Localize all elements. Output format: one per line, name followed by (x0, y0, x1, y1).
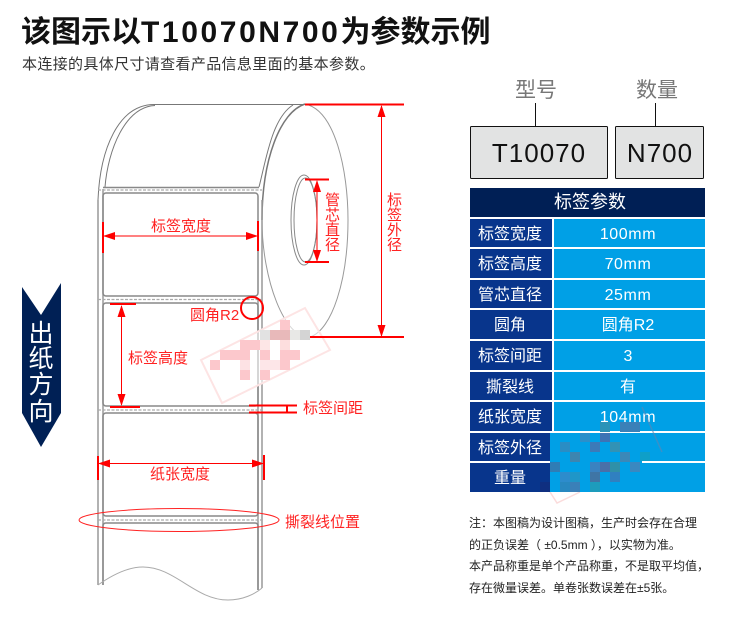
dimension: outer diameter: 外 (387, 222, 402, 239)
row: tear line (470, 372, 705, 400)
model code box: T10070 (492, 138, 586, 168)
row: label gap (470, 341, 705, 370)
note text: 存在微量误差。单卷张数误差在±5张。 (469, 580, 674, 595)
dimension: label width: 标签宽度 (151, 218, 211, 235)
subtitle: 本连接的具体尺寸请查看产品信息里面的基本参数。 (22, 56, 375, 73)
dimension: paper width: 纸张宽度 (150, 466, 210, 483)
title: 该图示以T10070N700为参数示例 (21, 16, 490, 49)
parameter table: 标签参数 (554, 192, 626, 212)
parameter table (470, 188, 705, 492)
core hole (291, 175, 317, 265)
row: paper width: 104mm (600, 409, 656, 426)
row: outer diameter (470, 433, 705, 461)
row: weight: 重量 (494, 469, 526, 487)
perforation lines (98, 190, 262, 520)
watermark stamp outline (642, 407, 662, 452)
note text: 本产品称重是单个产品称重，不是取平均值， (469, 558, 709, 573)
red dimension annotations (79, 104, 404, 532)
note text: 的正负误差（ ±0.5mm ），以实物为准。 (469, 537, 681, 552)
roll end face inner rim (262, 104, 305, 220)
roll body outline (98, 104, 305, 200)
row: label gap: 3 (624, 348, 633, 365)
row: tear line: 撕裂线 (486, 378, 534, 396)
dimension: paper width (98, 455, 264, 483)
dimension: label gap (249, 400, 363, 417)
dimension: outer diameter: 径 (387, 237, 402, 254)
row: corner (470, 310, 705, 339)
quantity code box: 数量 (636, 79, 678, 102)
dimension: outer diameter: 标 (387, 192, 402, 209)
watermark stamp outline (201, 308, 330, 403)
row: label height (470, 249, 705, 278)
dimension: label height (110, 304, 188, 407)
row: paper width: 纸张宽度 (478, 408, 542, 426)
row: core diameter: 管芯直径 (478, 286, 542, 304)
callout: tear line position (79, 508, 360, 532)
watermark: blue mosaic (540, 407, 662, 503)
arrow: paper feed direction (22, 283, 61, 447)
dimension: corner radius: 圆角R2 (190, 307, 239, 324)
row: tear line: 有 (620, 378, 636, 396)
dimension: core diameter: 径 (325, 237, 340, 254)
model code box: 型号 (515, 79, 557, 102)
row: label width: 100mm (600, 226, 656, 243)
row: core diameter: 25mm (605, 287, 651, 304)
label 3 (103, 413, 258, 516)
arrow: paper feed direction: 出 (28, 320, 54, 348)
dimension: outer diameter: 签 (387, 207, 402, 224)
dimension: label height: 标签高度 (128, 350, 188, 367)
diagram: label roll (98, 104, 348, 600)
dimension: label gap: 标签间距 (303, 400, 363, 417)
dimension: core diameter: 芯 (325, 207, 340, 224)
watermark: pink mosaic (201, 308, 330, 403)
model code box (470, 79, 608, 178)
row: corner: 圆角 (494, 316, 526, 334)
arrow: paper feed direction: 纸 (28, 345, 54, 373)
label 1 (103, 193, 258, 296)
quantity code box: N700 (627, 138, 693, 168)
arrow: paper feed direction: 方 (28, 371, 54, 399)
callout: tear line position: 撕裂线位置 (285, 514, 360, 531)
row: label height: 标签高度 (478, 255, 542, 273)
roll end face (262, 104, 348, 337)
paper strip edges (98, 189, 262, 590)
dimension: core diameter (305, 180, 340, 262)
row: corner: 圆角R2 (602, 316, 654, 334)
torn paper end (98, 567, 262, 600)
row: core diameter (470, 280, 705, 308)
arrow: paper feed direction: 向 (28, 398, 54, 426)
dimension: label width (103, 218, 258, 253)
row: label height: 70mm (605, 256, 651, 273)
table header (470, 188, 705, 217)
row: label width: 标签宽度 (478, 225, 542, 243)
row: label width (470, 219, 705, 247)
row: outer diameter: 标签外径 (478, 439, 542, 457)
dimension: core diameter: 管 (325, 192, 340, 209)
row: paper width (470, 402, 705, 431)
dimension: core diameter: 直 (325, 222, 340, 239)
row: weight (470, 463, 705, 492)
note text (469, 515, 709, 595)
row: label gap: 标签间距 (478, 347, 542, 365)
top label edge (103, 186, 259, 188)
quantity code box (616, 79, 704, 178)
roll top inner edge (105, 105, 293, 187)
label 4 (103, 523, 258, 590)
dimension: corner radius (190, 297, 263, 324)
dimension: outer diameter (305, 104, 404, 337)
label 2 (103, 303, 258, 406)
note text: 注：本图稿为设计图稿，生产时会存在合理 (469, 515, 697, 530)
